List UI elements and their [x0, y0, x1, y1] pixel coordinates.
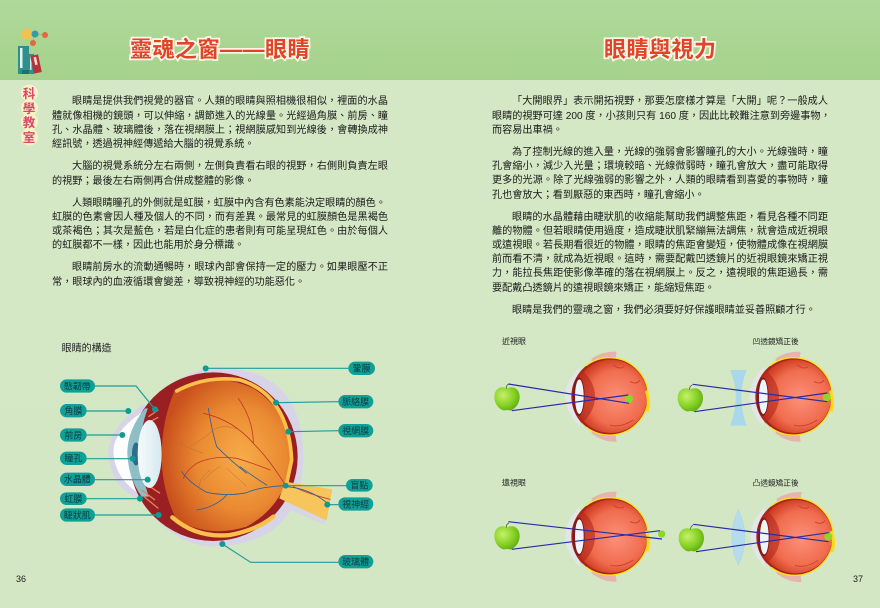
- text block: left page body: 經訊號，透過視神經傳遞給大腦的視覺系統。: [52, 139, 254, 150]
- label: retina: 視網膜: [342, 425, 369, 436]
- label: suspensory ligament: [60, 379, 95, 393]
- label: blind spot: 盲點: [350, 480, 368, 491]
- label: retina: [338, 424, 373, 437]
- panel: hyperopia and convex lens correction: [494, 478, 835, 582]
- label: ciliary muscle: [60, 508, 95, 522]
- text block: right page body: 「大開眼界」表示開拓視野，那要怎麼樣才算是「大開」呢？一般成人: [512, 96, 828, 107]
- text block: right page body: 要配戴凸透鏡片的遠視眼鏡來矯正，能縮短焦距。: [492, 283, 715, 294]
- text block: left page body: 虹膜的色素會因人種及個人的不同，而有差異。最常見的虹膜顏色是黑褐色: [52, 212, 388, 223]
- caption: corrected with convex lens: 凸透鏡矯正後: [753, 478, 799, 488]
- label: choroid: [338, 395, 373, 408]
- side tab: science classroom: [21, 84, 38, 146]
- label: optic nerve: 視神經: [342, 498, 369, 509]
- hyperopic eye: [494, 492, 665, 582]
- text block: right page body: 孔會縮小，減少入光量；環境較暗、光線微弱時，瞳孔會放大，盡可能取得: [492, 161, 828, 172]
- label: anterior chamber: 前房: [64, 429, 82, 440]
- text block: left page body: 眼睛是提供我們視覺的器官。人類的眼睛與照相機很相似，裡面的水晶: [72, 96, 388, 107]
- label: vitreous body: [338, 555, 373, 568]
- left title: 靈魂之窗——眼睛: [130, 37, 310, 62]
- iris: [132, 442, 140, 466]
- text block: left page body: 孔、水晶體、玻璃體後，落在視網膜上；視網膜感知到光線後，會轉換成神: [52, 125, 388, 136]
- label: lens: [60, 473, 95, 486]
- page number 37: 37: [853, 574, 863, 584]
- side tab: science classroom: 科: [23, 86, 36, 101]
- label: anterior chamber: [60, 428, 87, 442]
- label: optic nerve: [338, 497, 373, 511]
- text block: left page body: 常，眼球內的血液循環會變差，導致視神經的功能惡化。: [52, 277, 305, 288]
- text block: left page body: 體就像相機的鏡頭，可以伸縮，調節進入的光線量。光經過角膜、前房、瞳: [52, 111, 388, 122]
- myopic eye: [494, 352, 650, 442]
- text block: left page body: 的虹膜都不一樣，因此也能用於身分標識。: [52, 240, 244, 251]
- convex lens: [732, 509, 745, 566]
- label: suspensory ligament: 懸韌帶: [64, 380, 91, 391]
- label: ciliary muscle: 睫狀肌: [64, 509, 91, 520]
- text block: right page body: 眼睛的水晶體藉由睫狀肌的收縮能幫助我們調整焦距，看見各種不同距: [512, 212, 828, 223]
- leader lines: [87, 368, 348, 562]
- text block: right page body: 眼睛的視野可達 200 度，小孩則只有 160 度，因此比較難注意到旁邊事物，: [492, 111, 831, 122]
- label: cornea: 角膜: [64, 405, 82, 416]
- side tab: science classroom: 學: [23, 101, 35, 116]
- caption: corrected with concave lens: 凹透鏡矯正後: [753, 336, 799, 346]
- optic nerve: [279, 482, 332, 521]
- text block: left page body: [52, 95, 388, 288]
- text block: right page body: 更多的光源。除了光線強弱的影響之外，人類的眼睛看到喜愛的事物時，瞳: [492, 175, 828, 186]
- panel: eye structure diagram: [60, 342, 375, 568]
- text block: left page body: 或茶褐色；其次是藍色，若是白化症的患者則有可能呈現紅色。由於每個人: [52, 226, 388, 237]
- text block: right page body: 孔也會放大；看到厭惡的東西時，瞳孔會縮小。: [492, 190, 705, 201]
- label: blind spot: [346, 479, 373, 492]
- yellow choroid arcs: [177, 379, 292, 487]
- icon: books and molecule logo: [18, 28, 48, 74]
- text block: right page body: 前而看不清，就成為近視眼。這時，需要配戴凹透鏡片的近視眼鏡來矯正視: [492, 254, 828, 265]
- caption: hyperopia: 遠視眼: [502, 478, 526, 488]
- text block: right page body: 眼睛是我們的靈魂之窗，我們必須要好好保護眼睛並妥善照顧才行。: [512, 305, 816, 316]
- label: pupil: 瞳孔: [64, 453, 82, 464]
- label: choroid: 脈絡膜: [342, 396, 369, 407]
- right title: 眼睛與視力: [604, 37, 717, 62]
- panel: myopia and concave lens correction: [494, 336, 834, 442]
- label: cornea: [60, 404, 87, 417]
- retinal blood vessels: [180, 398, 330, 510]
- page number 36: 36: [16, 574, 26, 584]
- label: iris: 虹膜: [64, 494, 82, 504]
- text block: left page body: 大腦的視覺系統分左右兩側，左側負責看右眼的視野，右側則負責左眼: [72, 161, 388, 172]
- heading: eye structure: 眼睛的構造: [62, 342, 112, 355]
- text block: right page body: 力，能拉長焦距使影像準確的落在視網膜上。反之，遠視眼的焦距過長，需: [492, 268, 828, 279]
- label: pupil: [60, 452, 87, 465]
- ciliary strands: [142, 410, 160, 508]
- corrected eye: [679, 492, 835, 582]
- text block: right page body: 或遠視眼。若長期看很近的物體，眼睛的焦距會變短，使物體成像在視網膜: [492, 240, 828, 251]
- label: sclera: [348, 362, 375, 375]
- lens: [138, 420, 162, 488]
- caption: myopia: 近視眼: [502, 336, 526, 346]
- orange retina globe: [162, 380, 291, 531]
- text block: right page body: 而容易出車禍。: [492, 125, 563, 136]
- text block: left page body: 的視野；最後左右兩側再合併成整體的影像。: [52, 176, 254, 187]
- side tab: science classroom: 教: [23, 115, 36, 130]
- label: lens: 水晶體: [64, 474, 91, 485]
- text block: right page body: 離的物體。但若眼睛使用過度，造成睫狀肌緊繃無法調焦，就會造成近視眼: [492, 226, 828, 237]
- text block: left page body: 眼睛前房水的流動通暢時，眼球內部會保持一定的壓力。如果眼壓不正: [72, 262, 388, 273]
- text block: right page body: 為了控制光線的進入量，光線的強弱會影響瞳孔的大小。光線強時，瞳: [512, 147, 828, 158]
- text block: right page body: [492, 95, 831, 316]
- side tab: science classroom: 室: [23, 130, 35, 145]
- label: vitreous body: 玻璃體: [342, 556, 369, 567]
- concave lens: [730, 370, 747, 426]
- leader dots: [119, 365, 330, 547]
- label: sclera: 鞏膜: [353, 364, 371, 374]
- corrected eye: [678, 352, 834, 442]
- header band: [0, 0, 880, 80]
- eyeball anatomy illustration: [108, 367, 332, 547]
- label: iris: [60, 492, 87, 505]
- text block: left page body: 人類眼睛瞳孔的外側就是虹膜，虹膜中內含有色素能決定眼睛的顏色。: [72, 198, 386, 209]
